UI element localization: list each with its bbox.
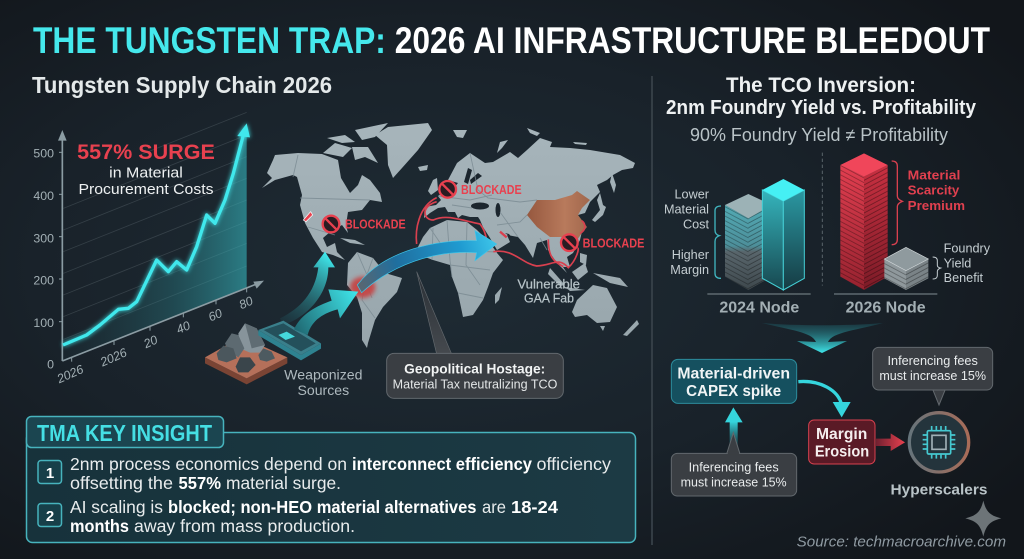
line chart: material cost surge	[33, 112, 264, 386]
box: capex spike: CAPEX spike	[686, 383, 781, 400]
bar group: 2026 node: 2026 Node	[846, 300, 926, 317]
label: vulnerable gaa fab	[517, 277, 580, 306]
y axis labels: 300	[33, 231, 54, 245]
callout: inferencing fees top: Inferencing fees	[887, 354, 978, 368]
callout: 557% surge: 557% SURGE	[77, 140, 215, 164]
y axis labels	[33, 147, 54, 371]
x axis labels: 40	[174, 318, 193, 337]
callout: inferencing fees bottom	[671, 433, 797, 496]
callout: inferencing fees top: must increase 15%	[879, 369, 986, 383]
callout: inferencing fees top	[873, 347, 993, 405]
bar labels: lower cost and margin: Margin	[670, 263, 709, 277]
x axis labels	[54, 294, 255, 386]
insight 2: are	[482, 497, 506, 517]
icon: sparkle	[965, 501, 1001, 537]
label: hyperscalers: Hyperscalers	[890, 482, 987, 498]
insight 2: 18-24	[511, 497, 558, 517]
flow diagram	[671, 347, 1006, 551]
label: material scarcity premium: Premium	[908, 198, 965, 213]
arrow: teal up to north america	[280, 252, 335, 325]
insight 2: away from mass production.	[134, 516, 355, 536]
source: Source: techmacroarchive.com	[797, 535, 1006, 551]
heading: tco inversion	[666, 74, 977, 119]
arrow: fees up to capex	[725, 407, 743, 453]
stacked bars comparison	[664, 153, 991, 317]
callout: geopolitical hostage: Geopolitical Hostage:	[404, 361, 545, 376]
y axis labels: 0	[47, 357, 54, 371]
insight 1: material surge.	[226, 473, 341, 493]
callout: 557% surge: in Material	[109, 165, 183, 181]
insight 2: blocked; non-HEO material alternatives	[168, 497, 477, 517]
bar group: 2026 node	[834, 153, 937, 317]
insight 1: 2nm process economics depend on	[70, 454, 347, 474]
insight 1	[38, 454, 611, 493]
x axis labels: 2026	[97, 345, 129, 370]
x axis labels: 2026	[54, 362, 86, 386]
blockade marker: asia: BLOCKADE	[583, 236, 644, 250]
x axis labels: 60	[206, 306, 225, 324]
blockade marker: north america	[323, 216, 406, 232]
blockade routes	[416, 198, 585, 268]
arrow: margin to hyperscalers	[876, 433, 905, 451]
china highlight	[527, 191, 590, 240]
bar labels: lower cost and margin	[664, 188, 721, 278]
area under curve	[63, 125, 247, 361]
label: weaponized sources: Sources	[297, 383, 349, 398]
bar labels: lower cost and margin: Higher	[672, 248, 709, 262]
label: vulnerable gaa fab: Vulnerable	[517, 277, 580, 291]
blockade marker: europe: BLOCKADE	[461, 183, 522, 197]
insight 1: 1	[46, 465, 54, 482]
label: material scarcity premium: Material	[908, 167, 960, 182]
bar group: 2024 node	[707, 179, 811, 317]
peru source hotspot	[350, 277, 375, 298]
blockade marker: asia	[561, 234, 644, 251]
label: vulnerable gaa fab: GAA Fab	[524, 292, 574, 306]
label: foundry yield benefit	[933, 242, 991, 285]
axes	[59, 138, 257, 362]
box: margin erosion	[809, 420, 875, 464]
callout: 557% surge	[77, 140, 215, 198]
label: weaponized sources	[284, 367, 362, 398]
subheading: 90% Foundry Yield ≠ Profitability	[690, 125, 948, 145]
insight 2: AI scaling is	[70, 497, 163, 517]
icon: copper base	[205, 337, 287, 384]
callout: 557% surge: Procurement Costs	[78, 182, 213, 198]
icon: tungsten ore	[217, 323, 275, 372]
label: foundry yield benefit: Benefit	[944, 271, 984, 285]
insight 2	[38, 497, 558, 536]
icons: ore, chip and supply arrow	[205, 289, 358, 384]
insight 1: interconnect efficiency	[352, 454, 532, 474]
arrow: blue trade flow	[357, 231, 497, 293]
heading: tungsten supply chain: Tungsten Supply Chain 2026	[32, 72, 332, 98]
tab heading: TMA KEY INSIGHT	[37, 420, 212, 446]
borders	[293, 153, 547, 318]
bar labels: lower cost and margin: Lower	[675, 188, 709, 202]
label: material scarcity premium	[892, 161, 965, 245]
insight 1: officiency	[536, 454, 611, 474]
box: margin erosion: Margin	[816, 426, 867, 443]
label: material scarcity premium: Scarcity	[908, 183, 960, 198]
label: foundry yield benefit: Foundry	[944, 242, 991, 256]
icon: chip slab	[258, 321, 321, 360]
box: capex spike	[671, 359, 797, 403]
icon: hyperscaler chip	[909, 413, 969, 472]
box: margin erosion: Erosion	[815, 444, 869, 461]
panel: tma key insight	[26, 416, 636, 542]
arrow: teal to south america	[294, 289, 358, 335]
y axis labels: 200	[33, 274, 54, 288]
insight 2: 2	[46, 508, 54, 525]
heading: tco inversion: 2nm Foundry Yield vs. Profitability	[666, 97, 977, 119]
insight 1: offsetting the	[70, 473, 173, 493]
arrow: capex to margin	[798, 381, 851, 417]
y axis labels: 400	[33, 189, 54, 203]
map overlays	[284, 181, 644, 398]
bar labels: lower cost and margin: Material	[664, 203, 709, 217]
callout: geopolitical hostage: Material Tax neutralizing TCO	[393, 377, 557, 391]
insight 2: months	[70, 516, 129, 536]
label: foundry yield benefit: Yield	[944, 256, 971, 270]
x axis labels: 20	[141, 333, 160, 351]
insight 1: 557%	[178, 473, 221, 493]
blockade marker: north america: BLOCKADE	[345, 218, 406, 232]
box: capex spike: Material-driven	[677, 365, 790, 382]
surge line	[63, 123, 250, 345]
y axis labels: 500	[33, 147, 54, 161]
callout: inferencing fees bottom: Inferencing fees	[689, 461, 779, 475]
label: weaponized sources: Weaponized	[284, 367, 362, 382]
continents	[262, 123, 639, 348]
arrow: converging down	[762, 323, 883, 353]
bar labels: lower cost and margin: Cost	[683, 218, 709, 232]
heading: tco inversion: The TCO Inversion:	[726, 74, 916, 97]
dark seas	[464, 168, 512, 238]
y axis labels: 100	[33, 316, 54, 330]
blockade marker: europe	[439, 181, 522, 198]
x axis labels: 80	[237, 294, 255, 312]
callout: inferencing fees bottom: must increase 15%	[681, 476, 787, 490]
callout: geopolitical hostage	[387, 272, 563, 398]
bar group: 2024 node: 2024 Node	[719, 300, 799, 317]
world map	[262, 123, 644, 398]
